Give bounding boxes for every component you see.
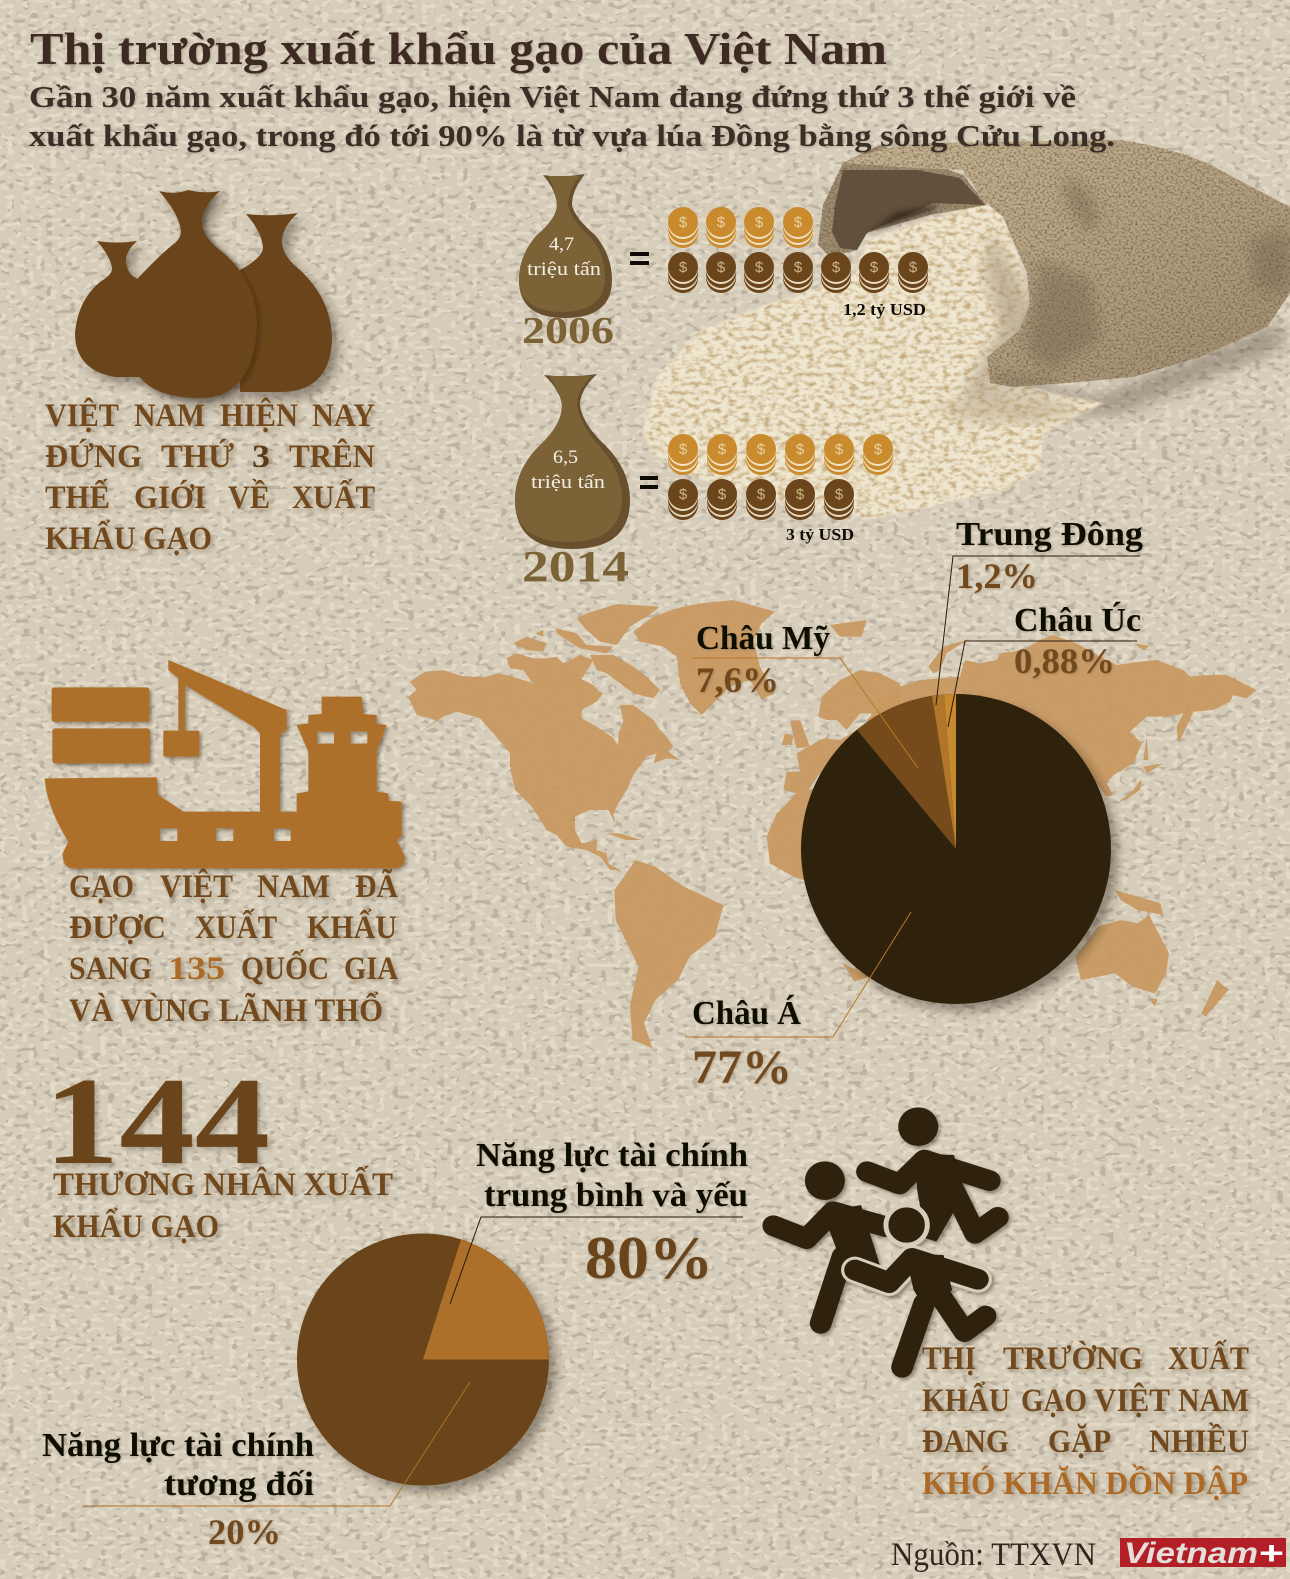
label: Chau My 7,6%: [696, 620, 830, 700]
text: Vietnam ranks third: NAY: [312, 398, 375, 434]
world map: [408, 600, 1257, 1048]
text: market difficulties: ĐANG: [922, 1424, 1009, 1460]
text: Vietnam ranks third: GIỚI: [134, 478, 206, 516]
text: exported to 135 countries: GIA: [344, 951, 398, 987]
label: relative capacity 20%: tương đối: [164, 1466, 314, 1503]
label: Chau Uc 0,88%: Châu Úc: [1014, 601, 1141, 639]
icon: 2014 bag: [515, 374, 630, 549]
coins: gold row: [668, 434, 893, 475]
year 2014: 2014: [522, 542, 629, 591]
text: exported to 135 countries: XUẤT: [195, 907, 277, 946]
map: Americas north and Greenland: [408, 600, 900, 890]
coins: gold row: $: [679, 441, 688, 458]
coins: dark row: $: [835, 486, 844, 503]
sack body: [843, 140, 1290, 387]
rice pile: [642, 205, 1104, 520]
text: Vietnam ranks third: NAM: [134, 398, 205, 434]
text: Vietnam ranks third: HIỆN: [220, 396, 298, 434]
text: market difficulties: THỊ: [922, 1341, 976, 1377]
map: South America, Australia, islands: [615, 860, 1229, 1048]
coins: gold row: $: [755, 214, 764, 231]
label: average and weak capacity 80%: [476, 1137, 748, 1291]
text: exported to 135 countries: NAM: [257, 869, 330, 905]
label: relative capacity 20%: Năng lực tài chính: [42, 1427, 314, 1464]
label: Chau A 77%: [692, 995, 801, 1094]
panel: 2014 export: [515, 374, 893, 591]
text: Vietnam ranks third: THỨ: [161, 437, 234, 475]
coins: dark row: $: [870, 259, 879, 276]
text: Vietnam ranks third: VỀ: [228, 477, 270, 516]
label: relative capacity 20%: [42, 1427, 314, 1552]
logo: Vietnam+: Vietnam: [1124, 1537, 1258, 1570]
image: rice sack with spilled rice: [642, 140, 1290, 520]
logo: Vietnam+: [1120, 1535, 1286, 1571]
coins: dark row: [668, 479, 854, 520]
label: Trung Dong 1,2%: 1,2%: [956, 556, 1038, 596]
stat: 144 traders: KHẨU GẠO: [53, 1207, 219, 1245]
text: market difficulties: GẠO: [1021, 1383, 1087, 1419]
text: market difficulties: KHẨU: [922, 1381, 1010, 1419]
icon: 2006 bag: 4,7: [549, 234, 574, 255]
icon: three rice bags: [75, 190, 332, 398]
coins: dark row: $: [679, 486, 688, 503]
text: market difficulties: KHÓ KHĂN DỒN DẬP: [922, 1463, 1248, 1502]
leader lines for financial labels: [83, 1217, 743, 1506]
text: exported to 135 countries: [69, 867, 398, 1029]
icon: 2006 bag: triệu tấn: [527, 259, 602, 280]
text: Vietnam ranks third: VIỆT: [45, 396, 119, 434]
text: exported to 135 countries: QUỐC: [241, 948, 329, 987]
coins: dark row: $: [757, 486, 766, 503]
coins: dark row: $: [717, 259, 726, 276]
icon: 2014 bag: 6,5: [553, 447, 578, 468]
text: market difficulties: NAM: [1178, 1383, 1249, 1419]
coins: dark row: $: [796, 486, 805, 503]
label: Trung Dong 1,2%: [956, 516, 1143, 596]
icon: 2006 bag: [519, 174, 612, 318]
text: exported to 135 countries: GẠO: [69, 869, 134, 905]
stat: 144 traders: THƯƠNG NHÂN XUẤT: [53, 1164, 393, 1203]
text: Vietnam ranks third: ĐỨNG: [45, 437, 142, 475]
text: market difficulties: TRƯỜNG: [1003, 1339, 1143, 1377]
equals sign: [630, 252, 649, 265]
coins: dark row: $: [679, 259, 688, 276]
label: Chau A 77%: Châu Á: [692, 995, 801, 1032]
coins: gold row: $: [835, 441, 844, 458]
source credit: Nguồn: TTXVN: [891, 1537, 1096, 1573]
subtitle: Gần 30 năm xuất khẩu gạo, hiện Việt Nam đang đứng thứ 3 thế giới về: [29, 79, 1076, 114]
value: 3 ty USD: 3 tỷ USD: [786, 525, 854, 544]
pie chart: financial capacity: [297, 1234, 549, 1486]
year 2006: 2006: [522, 310, 614, 352]
text: exported to 135 countries: ĐƯỢC: [69, 910, 166, 946]
text: market difficulties: [922, 1338, 1249, 1502]
title: Thị trường xuất khẩu gạo của Việt Nam: [30, 23, 887, 74]
subtitle: [29, 79, 1115, 153]
coins: dark row: [668, 252, 928, 293]
text: market difficulties: XUẤT: [1168, 1338, 1249, 1377]
label: Chau My 7,6%: 7,6%: [696, 660, 779, 700]
leader lines for market labels: [685, 556, 1140, 1037]
text: Vietnam ranks third: KHẨU GẠO: [45, 519, 212, 557]
stat: 144 traders: [44, 1053, 393, 1245]
coins: gold row: $: [874, 441, 883, 458]
coins: gold row: $: [717, 214, 726, 231]
text: market difficulties: NHIỀU: [1149, 1421, 1249, 1460]
coins: dark row: $: [832, 259, 841, 276]
sack dark folds: [990, 175, 1290, 390]
coins: gold row: $: [718, 441, 727, 458]
label: Trung Dong 1,2%: Trung Đông: [956, 516, 1143, 553]
text: Vietnam ranks third: 3: [252, 439, 270, 475]
coins: dark row: $: [755, 259, 764, 276]
rice shading near sack: [960, 230, 1030, 400]
text: Vietnam ranks third: TRÊN: [289, 437, 375, 475]
coins: dark row: $: [909, 259, 918, 276]
text: exported to 135 countries: ĐÃ: [355, 868, 398, 905]
label: Chau My 7,6%: Châu Mỹ: [696, 620, 830, 657]
text: Vietnam ranks third: THẾ: [45, 477, 110, 516]
coins: dark row: $: [718, 486, 727, 503]
label: average and weak capacity 80%: Năng lực tài chính: [476, 1137, 748, 1174]
coins: gold row: $: [757, 441, 766, 458]
coins: dark row: $: [794, 259, 803, 276]
text: Vietnam ranks third: XUẤT: [292, 477, 375, 516]
coins: gold row: $: [794, 214, 803, 231]
subtitle: xuất khẩu gạo, trong đó tới 90% là từ vựa lúa Đồng bằng sông Cửu Long.: [29, 118, 1115, 153]
text: exported to 135 countries: VÀ VÙNG LÃNH THỔ: [69, 990, 383, 1029]
text: market difficulties: GẶP: [1048, 1422, 1111, 1460]
coins: gold row: $: [679, 214, 688, 231]
label: average and weak capacity 80%: 80%: [585, 1225, 713, 1291]
label: Chau Uc 0,88%: [1014, 601, 1141, 681]
label: average and weak capacity 80%: trung bình và yếu: [484, 1177, 748, 1214]
panel: 2006 export: [519, 174, 928, 352]
label: Chau Uc 0,88%: 0,88%: [1014, 641, 1115, 681]
map: Asia: [867, 635, 1257, 805]
text: exported to 135 countries: SANG: [69, 951, 152, 987]
text: exported to 135 countries: VIỆT: [160, 867, 233, 905]
logo: Vietnam+: +: [1259, 1535, 1284, 1571]
value: 1,2 ty USD: 1,2 tỷ USD: [843, 300, 926, 319]
label: relative capacity 20%: 20%: [208, 1512, 281, 1552]
icon: three running people: [773, 1107, 998, 1367]
equals sign: [640, 476, 658, 489]
text: market difficulties: VIỆT: [1094, 1381, 1170, 1419]
text: exported to 135 countries: KHẨU: [307, 908, 397, 946]
label: Chau A 77%: 77%: [692, 1041, 792, 1094]
pie chart: export markets: [801, 694, 1111, 1004]
icon: 2014 bag: triệu tấn: [531, 472, 606, 493]
text: exported to 135 countries: 135: [168, 951, 225, 987]
text: Vietnam ranks third: [45, 396, 375, 557]
coins: gold row: $: [796, 441, 805, 458]
sack interior: [818, 145, 987, 257]
stat: 144 traders: 144: [44, 1053, 270, 1191]
coins: gold row: [668, 207, 813, 248]
icon: cargo ship: [45, 660, 405, 868]
